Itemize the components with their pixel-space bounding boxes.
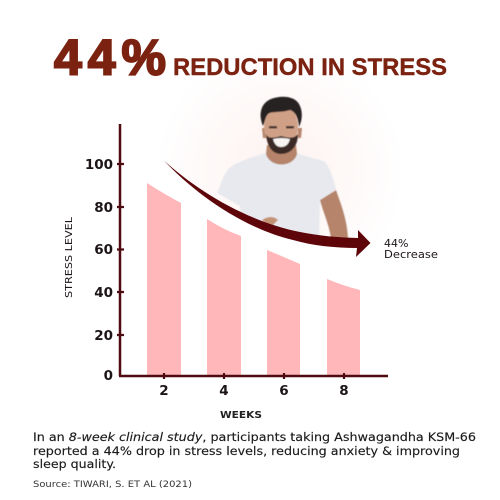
y axis numbers: 0: [104, 368, 113, 384]
background glow: [155, 45, 405, 295]
bar week 6: [267, 250, 300, 375]
description paragraph: reported a 44% drop in stress levels, reducing anxiety & improving: [33, 444, 460, 458]
title big percentage: 44%: [54, 30, 166, 86]
person smile: [273, 138, 290, 147]
y axis numbers: 60: [94, 242, 113, 258]
description paragraph: In an 8-week clinical study , participants taking Ashwagandha KSM-66: [33, 430, 476, 444]
person ears: [262, 128, 302, 138]
person arm: [320, 190, 348, 238]
y axis label: STRESS LEVEL: [64, 217, 75, 298]
bar week 2: [147, 183, 181, 375]
white area below the curve: [130, 150, 400, 370]
x axis numbers: 2: [159, 383, 169, 399]
trend arrow: [164, 160, 370, 257]
person hair: [261, 97, 302, 127]
y axis numbers: 40: [94, 285, 113, 301]
person: [217, 97, 348, 240]
bar week 4: [207, 219, 241, 375]
person neck: [266, 145, 297, 164]
source: Source: TIWARI, S. ET AL (2021): [33, 480, 192, 490]
title: [54, 30, 447, 86]
x axis numbers: [159, 383, 349, 399]
person shirt: [217, 153, 336, 240]
description paragraph: [33, 430, 476, 471]
person hand: [262, 217, 278, 228]
person eyes: [269, 126, 294, 128]
y axis numbers: 20: [94, 328, 113, 344]
description paragraph: sleep quality.: [33, 457, 116, 471]
title text: REDUCTION IN STRESS: [173, 54, 447, 81]
chart axes: [117, 124, 388, 379]
decrease callout: [384, 237, 438, 261]
x axis label: WEEKS: [220, 410, 262, 421]
person beard: [266, 134, 298, 154]
bar chart: [147, 183, 360, 375]
x axis numbers: 4: [219, 383, 229, 399]
y axis numbers: [85, 157, 113, 384]
y axis numbers: 100: [85, 157, 113, 173]
bar week 8: [327, 279, 360, 375]
x axis numbers: 6: [279, 383, 289, 399]
x axis numbers: 8: [339, 383, 349, 399]
y axis numbers: 80: [94, 200, 113, 216]
person face: [264, 103, 298, 151]
decrease callout: 44%: [384, 237, 408, 250]
decrease callout: Decrease: [384, 248, 438, 261]
